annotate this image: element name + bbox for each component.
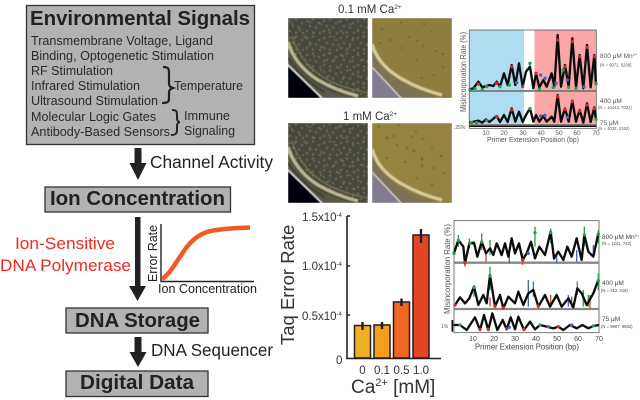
brace: immune signaling bbox=[171, 110, 180, 135]
chart: misincorporation rate, bottom bbox=[441, 221, 640, 352]
x axis tick labels: 40 bbox=[532, 336, 540, 343]
heading: 0.1 mM calcium plates: 2+ bbox=[394, 4, 402, 11]
label: DNA sequencer: DNA Sequencer bbox=[151, 340, 273, 360]
series labels: 2+ bbox=[633, 52, 638, 57]
series labels: (N = 4032, 2162) bbox=[598, 126, 630, 131]
x axis tick labels: 0 bbox=[359, 365, 366, 377]
label: immune signaling bbox=[184, 109, 235, 138]
shaded regions bbox=[470, 30, 596, 125]
x axis tick labels: 10 bbox=[469, 336, 477, 343]
series labels: (N = 9907, 9582) bbox=[601, 324, 633, 329]
axes bbox=[347, 216, 441, 358]
plate: 1 mM white colonies bbox=[288, 123, 368, 203]
x axis tick labels: 0.1 bbox=[374, 365, 390, 377]
plate: 0.1 mM blue colonies bbox=[372, 18, 452, 98]
x axis tick labels: 20 bbox=[490, 336, 498, 343]
x axis tick labels: 70 bbox=[592, 130, 600, 137]
text: signal list: Infrared Stimulation bbox=[31, 79, 140, 93]
series labels: (N = 1241, 742) bbox=[602, 241, 632, 246]
bar: 1.0 mM bbox=[413, 235, 429, 358]
label: immune signaling: Immune bbox=[184, 109, 230, 123]
series labels: (N = 312, 316) bbox=[601, 288, 628, 293]
data traces bbox=[452, 221, 600, 333]
box: DNA storage: DNA Storage bbox=[75, 310, 200, 332]
x axis label: Ion Concentration bbox=[158, 281, 257, 296]
x axis title: Primer Extension Position (bp) bbox=[487, 135, 579, 144]
arrow: signals to ion concentration bbox=[130, 148, 146, 180]
plate: 0.1 mM white colonies bbox=[288, 18, 368, 98]
scale label: .25% bbox=[454, 125, 466, 131]
scale label: 1% bbox=[441, 324, 449, 330]
y axis tick labels: -4 bbox=[337, 312, 343, 318]
brace: temperature bbox=[162, 67, 173, 103]
x axis tick labels: 1.0 bbox=[413, 365, 429, 377]
x axis tick labels: 30 bbox=[511, 336, 519, 343]
y axis tick labels: 0 bbox=[336, 355, 342, 367]
arrow: DNA storage to digital data bbox=[130, 337, 146, 367]
label: channel activity: Channel Activity bbox=[150, 152, 273, 172]
chart: taq error rate bars bbox=[277, 212, 441, 398]
y axis tick labels: 0.5x10 bbox=[302, 311, 337, 323]
text: signal list bbox=[31, 34, 214, 139]
x axis tick labels: 40 bbox=[537, 130, 545, 137]
text: signal list: RF Stimulation bbox=[31, 64, 113, 78]
curve bbox=[162, 228, 250, 279]
heading: environmental signals: Environmental Signals bbox=[30, 8, 250, 30]
heading: 0.1 mM calcium plates: 0.1 mM Ca bbox=[338, 4, 394, 16]
plate: 1 mM blue colonies bbox=[372, 123, 452, 203]
series labels: (N = 6072, 6208) bbox=[600, 62, 632, 68]
x axis tick labels: 70 bbox=[595, 336, 603, 343]
bar: 0 mM bbox=[354, 326, 370, 358]
label: ion-sensitive DNA polymerase: DNA Polymerase bbox=[0, 257, 131, 275]
x axis tick labels: 50 bbox=[553, 336, 561, 343]
chart: misincorporation rate, manganese top bbox=[454, 30, 638, 144]
series labels: 2+ bbox=[635, 233, 640, 238]
box: digital data: Digital Data bbox=[80, 372, 195, 394]
box: ion concentration: Ion Concentration bbox=[50, 188, 225, 210]
heading: 1 mM calcium plates: 2+ bbox=[390, 111, 397, 118]
series labels: 800 μM Mn bbox=[600, 53, 633, 60]
bar: 0.5 mM bbox=[394, 302, 410, 358]
x axis tick labels: 30 bbox=[519, 130, 527, 137]
text: signal list: Binding, Optogenetic Stimulation bbox=[31, 49, 214, 63]
y axis title: Misincorporation Rate (%) bbox=[442, 224, 452, 314]
x axis tick labels: 20 bbox=[500, 130, 508, 137]
box: digital data bbox=[66, 371, 208, 396]
data traces bbox=[468, 30, 598, 128]
label: immune signaling: Signaling bbox=[184, 124, 235, 138]
series labels: 75 μM bbox=[602, 316, 620, 323]
arrow: ion concentration to DNA storage bbox=[129, 217, 146, 301]
bar: 0.1 mM bbox=[374, 325, 390, 358]
error bars bbox=[362, 229, 421, 330]
heading: 1 mM calcium plates: 1 mM Ca bbox=[343, 111, 390, 123]
x axis tick labels: 60 bbox=[573, 130, 581, 137]
series labels: (N = 10443, 7022) bbox=[598, 105, 632, 110]
y axis tick labels bbox=[302, 212, 343, 367]
y axis tick labels: 1.5x10 bbox=[302, 212, 337, 224]
chart: error rate versus ion concentration bbox=[145, 224, 257, 296]
x axis tick labels: 60 bbox=[574, 336, 582, 343]
y axis label: Error Rate bbox=[145, 225, 160, 282]
x axis title: [mM] bbox=[388, 377, 435, 398]
x axis title: Ca bbox=[351, 377, 375, 398]
series labels: 800 μM Mn bbox=[602, 234, 635, 241]
x axis title: 2+ bbox=[375, 377, 388, 389]
y axis title: Misincorporation Rate (%) bbox=[459, 32, 468, 112]
series labels bbox=[598, 52, 638, 131]
x axis tick labels: 0.5 bbox=[394, 365, 410, 377]
text: signal list: Molecular Logic Gates bbox=[31, 110, 156, 124]
series labels: 400 μM bbox=[602, 280, 624, 287]
panel: environmental signals bbox=[26, 6, 254, 144]
y axis tick labels: -4 bbox=[337, 262, 343, 268]
text: signal list: Antibody-Based Sensors bbox=[31, 125, 170, 139]
x axis title: Primer Extension Position (bp) bbox=[475, 342, 579, 352]
text: signal list: Transmembrane Voltage, Ligand bbox=[31, 34, 213, 48]
series labels: 400 μM bbox=[600, 98, 622, 105]
label: ion-sensitive DNA polymerase: Ion-Sensitive bbox=[15, 235, 115, 253]
x axis tick labels bbox=[482, 130, 600, 137]
series labels bbox=[601, 233, 640, 329]
x axis tick labels: 50 bbox=[555, 130, 563, 137]
x axis tick labels bbox=[359, 365, 429, 377]
text: signal list: Ultrasound Stimulation bbox=[31, 94, 158, 108]
label: ion-sensitive DNA polymerase bbox=[0, 235, 131, 275]
label: temperature: Temperature bbox=[174, 79, 243, 93]
y axis tick labels: -4 bbox=[337, 213, 343, 219]
x axis tick labels bbox=[469, 336, 603, 343]
y axis title: Taq Error Rate bbox=[277, 225, 298, 345]
series labels: 75 μM bbox=[600, 120, 618, 127]
y axis tick labels: 1.0x10 bbox=[302, 261, 337, 273]
x axis tick labels: 10 bbox=[482, 130, 490, 137]
